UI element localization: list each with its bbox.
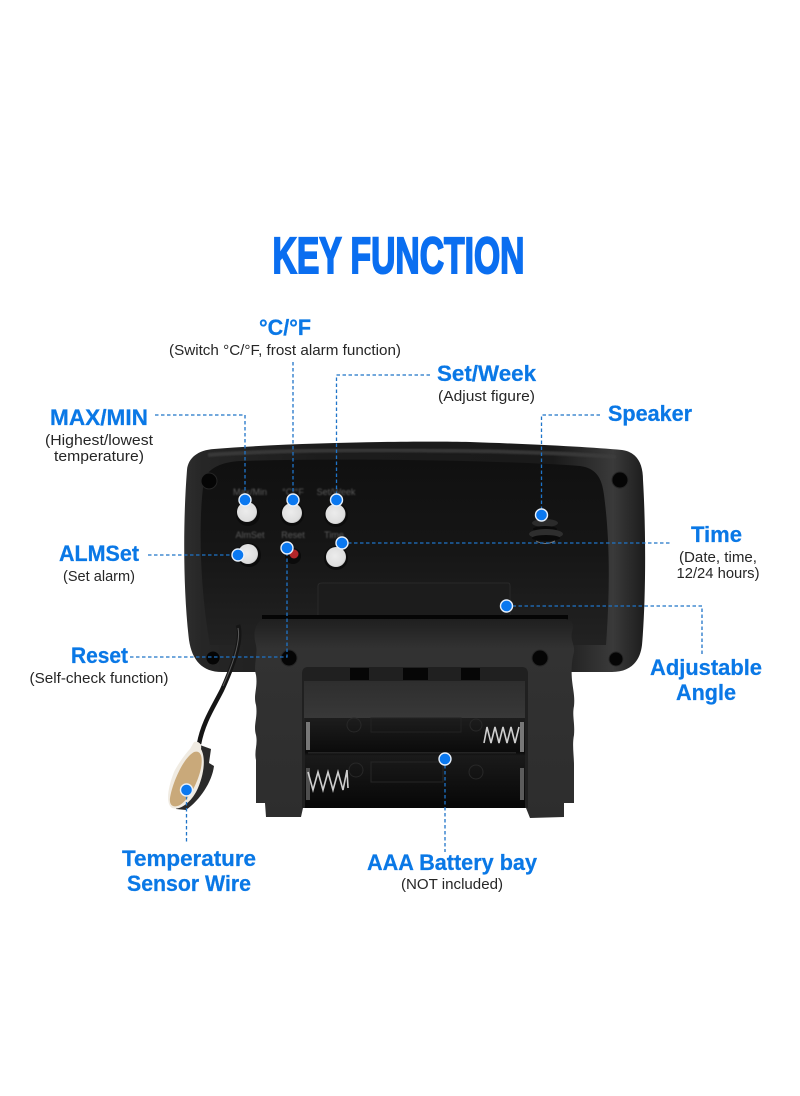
label: Reset: Reset — [71, 643, 129, 668]
button legends — [233, 487, 356, 540]
kickstand — [318, 583, 510, 618]
label: Time: 12/24 hours) — [676, 566, 760, 582]
label: MAX/MIN: (Highest/lowest — [45, 433, 153, 449]
label: Set/Week: Set/Week — [437, 361, 537, 386]
title: KEY FUNCTION — [272, 227, 524, 284]
button legends: Set/Week — [317, 487, 356, 497]
device: battery stand — [254, 619, 574, 818]
label: ALMSet — [59, 541, 140, 585]
label: Set/Week — [437, 361, 537, 405]
body shell — [184, 442, 645, 672]
compartment cover — [304, 681, 525, 718]
button legends: Max/Min — [233, 487, 267, 497]
label: Temperature Sensor Wire: Temperature — [122, 846, 256, 871]
stand screws — [281, 650, 548, 666]
button legends: Time — [324, 530, 344, 540]
label: ALMSet: (Set alarm) — [63, 569, 135, 585]
label: Temperature Sensor Wire: Sensor Wire — [127, 871, 251, 896]
button legends: AlmSet — [235, 530, 265, 540]
leader lines — [130, 362, 702, 852]
label: Time — [676, 522, 760, 582]
battery bay — [305, 718, 525, 808]
sensor cable highlight — [223, 628, 239, 686]
button legends: Reset — [281, 530, 305, 540]
label: AAA Battery bay: (NOT included) — [401, 877, 503, 893]
label: °C/°F — [169, 315, 401, 359]
device: sensor wire and probe — [168, 625, 239, 810]
sensor cable — [199, 625, 239, 744]
label: MAX/MIN: temperature) — [54, 449, 144, 465]
buttons — [236, 502, 348, 570]
label: MAX/MIN: MAX/MIN — [50, 405, 148, 430]
bottom left spring — [308, 770, 348, 790]
stand housing — [254, 619, 574, 818]
top highlight band — [208, 450, 616, 457]
label: Reset: (Self-check function) — [30, 671, 168, 687]
speaker — [529, 519, 563, 544]
label: AAA Battery bay — [367, 850, 538, 893]
device: main body — [184, 442, 645, 672]
label: °C/°F: (Switch °C/°F, frost alarm function) — [169, 343, 401, 359]
label: MAX/MIN — [45, 405, 153, 465]
label: Temperature Sensor Wire — [122, 846, 256, 896]
stand shadow — [262, 615, 568, 620]
label: Adjustable Angle — [650, 655, 762, 705]
label: Adjustable Angle: Adjustable — [650, 655, 762, 680]
sensor probe — [168, 742, 214, 810]
recessed back panel — [201, 460, 609, 645]
top right spring — [484, 727, 519, 743]
label: ALMSet: ALMSet — [59, 541, 140, 566]
label: Reset — [30, 643, 168, 687]
label: Adjustable Angle: Angle — [676, 680, 736, 705]
label: AAA Battery bay: AAA Battery bay — [367, 850, 538, 875]
button legends: °C/°F — [282, 487, 304, 497]
label: Time: (Date, time, — [679, 550, 757, 566]
label: Set/Week: (Adjust figure) — [438, 389, 535, 405]
compartment recess — [302, 667, 528, 808]
label: Speaker: Speaker — [608, 401, 692, 426]
label: Time: Time — [691, 522, 742, 547]
label: °C/°F: °C/°F — [259, 315, 311, 340]
red reset button — [285, 548, 301, 564]
callout markers — [180, 494, 548, 796]
latch slots — [350, 668, 480, 680]
corner screws — [201, 472, 628, 666]
